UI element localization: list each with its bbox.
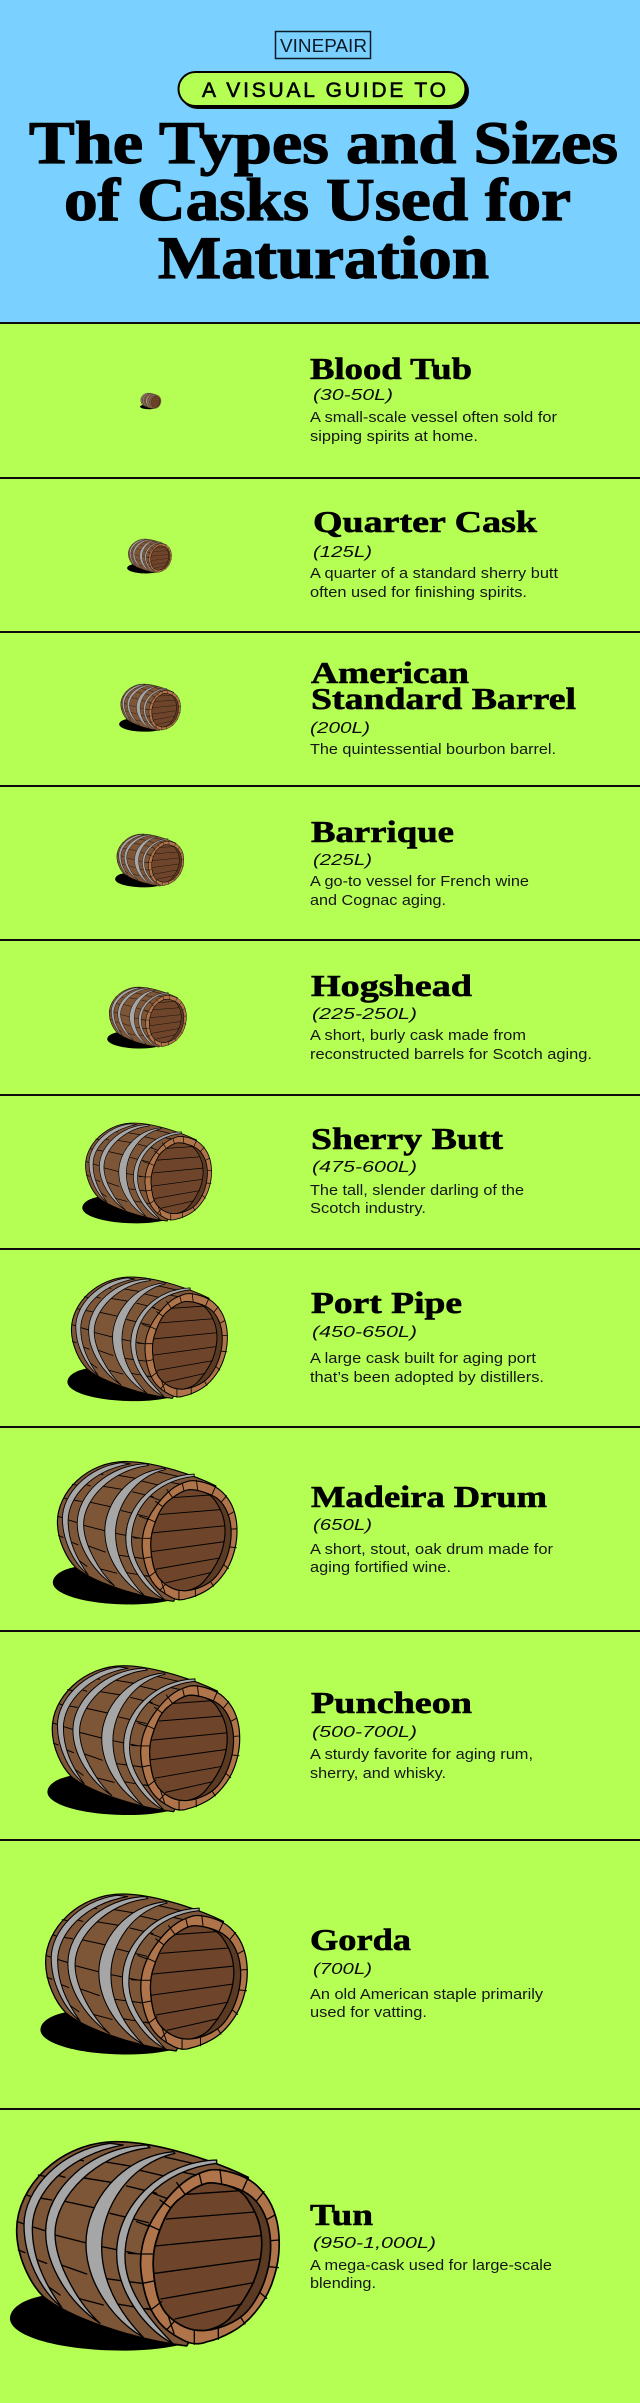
text: Barrique bbox=[310, 814, 529, 909]
text: Hogshead: A short, burly cask made from bbox=[310, 1028, 526, 1044]
text: Tun bbox=[310, 2197, 552, 2292]
panel: Puncheon bbox=[0, 1630, 640, 1840]
text: Barrique: (225L) bbox=[313, 852, 372, 869]
text: Puncheon bbox=[310, 1685, 533, 1782]
text: Blood Tub bbox=[310, 351, 557, 445]
text: Gorda: An old American staple primarily bbox=[310, 1987, 544, 2003]
text: Port Pipe: A large cask built for aging port bbox=[310, 1351, 536, 1367]
panel: Barrique bbox=[0, 785, 640, 940]
text: Puncheon: A sturdy favorite for aging rum, bbox=[310, 1747, 533, 1763]
panel: Hogshead bbox=[0, 939, 640, 1095]
text: Hogshead: reconstructed barrels for Scotch aging. bbox=[310, 1047, 592, 1063]
text: Gorda: (700L) bbox=[313, 1961, 372, 1978]
text: American Standard Barrel bbox=[310, 655, 576, 758]
badge: A Visual Guide To bbox=[178, 72, 469, 109]
text: Blood Tub: A small-scale vessel often sold for bbox=[310, 410, 557, 426]
text: Quarter Cask: Quarter Cask bbox=[313, 504, 538, 539]
text: Quarter Cask: often used for finishing spirits. bbox=[310, 585, 527, 601]
text: Barrique: and Cognac aging. bbox=[310, 893, 446, 909]
title: Maturation bbox=[158, 225, 489, 291]
text: American Standard Barrel: (200L) bbox=[310, 720, 370, 737]
text: Sherry Butt: Scotch industry. bbox=[310, 1201, 426, 1217]
text: Gorda: Gorda bbox=[310, 1922, 412, 1957]
text: Hogshead: (225-250L) bbox=[312, 1006, 417, 1023]
text: American Standard Barrel: Standard Barrel bbox=[311, 681, 576, 716]
icon: Barrique barrel bbox=[115, 834, 184, 887]
text: Puncheon: (500-700L) bbox=[312, 1724, 417, 1741]
text: Hogshead: Hogshead bbox=[311, 968, 472, 1003]
text: American Standard Barrel: The quintessential bourbon barrel. bbox=[310, 742, 556, 758]
text: Port Pipe: (450-650L) bbox=[312, 1324, 417, 1341]
text: Barrique: A go-to vessel for French wine bbox=[310, 874, 529, 890]
text: Port Pipe: Port Pipe bbox=[311, 1285, 462, 1320]
text: Hogshead bbox=[310, 968, 592, 1063]
text: Port Pipe bbox=[310, 1285, 544, 1386]
icon: Sherry Butt barrel bbox=[82, 1123, 212, 1223]
icon: Tun barrel bbox=[10, 2142, 279, 2351]
panel: Quarter Cask bbox=[0, 477, 640, 632]
panel: Gorda bbox=[0, 1839, 640, 2109]
text: Blood Tub: (30-50L) bbox=[313, 387, 393, 404]
text: Quarter Cask: A quarter of a standard sherry butt bbox=[310, 566, 558, 582]
text: Puncheon: sherry, and whisky. bbox=[310, 1766, 446, 1782]
text: Madeira Drum: (650L) bbox=[313, 1517, 372, 1534]
badge: A Visual Guide To: A VISUAL GUIDE TO bbox=[202, 79, 446, 102]
icon: American Standard Barrel barrel bbox=[119, 684, 181, 732]
panel: American Standard Barrel bbox=[0, 631, 640, 786]
text: Tun: blending. bbox=[310, 2276, 376, 2292]
icon: Puncheon barrel bbox=[47, 1666, 240, 1815]
panel: Blood Tub bbox=[0, 322, 640, 478]
panel: Tun bbox=[0, 2108, 640, 2403]
icon: Hogshead barrel bbox=[107, 987, 186, 1048]
text: Quarter Cask: (125L) bbox=[313, 544, 372, 561]
panel: Sherry Butt bbox=[0, 1094, 640, 1249]
icon: Quarter Cask barrel bbox=[127, 539, 172, 573]
title: The Types and Sizes bbox=[29, 110, 618, 176]
text: Barrique: Barrique bbox=[311, 814, 454, 849]
text: Sherry Butt: Sherry Butt bbox=[311, 1121, 504, 1156]
text: American Standard Barrel: American bbox=[311, 655, 469, 690]
text: Puncheon: Puncheon bbox=[311, 1685, 472, 1720]
text: Tun: Tun bbox=[310, 2197, 373, 2232]
title bbox=[29, 110, 618, 291]
icon: Port Pipe barrel bbox=[67, 1277, 227, 1401]
text: Sherry Butt bbox=[310, 1121, 524, 1217]
text: Gorda bbox=[310, 1922, 544, 2021]
text: Sherry Butt: The tall, slender darling of the bbox=[310, 1183, 524, 1199]
icon: Madeira Drum barrel bbox=[53, 1462, 237, 1604]
text: Quarter Cask bbox=[310, 504, 558, 601]
text: Port Pipe: that’s been adopted by distillers. bbox=[310, 1370, 544, 1386]
text: Sherry Butt: (475-600L) bbox=[312, 1159, 417, 1176]
panel: header bbox=[0, 0, 640, 323]
text: Madeira Drum bbox=[310, 1479, 553, 1576]
panel: Port Pipe bbox=[0, 1248, 640, 1427]
icon: Blood Tub barrel bbox=[140, 393, 161, 409]
text: Gorda: used for vatting. bbox=[310, 2005, 427, 2021]
logo: VinePair: VINEPAIR bbox=[280, 36, 367, 56]
panel: Madeira Drum bbox=[0, 1426, 640, 1631]
text: Blood Tub: sipping spirits at home. bbox=[310, 429, 478, 445]
logo: VinePair bbox=[276, 32, 370, 58]
title: of Casks Used for bbox=[64, 167, 571, 233]
text: Madeira Drum: A short, stout, oak drum made for bbox=[310, 1542, 553, 1558]
text: Blood Tub: Blood Tub bbox=[310, 351, 472, 386]
text: Madeira Drum: aging fortified wine. bbox=[310, 1560, 451, 1576]
text: Tun: (950-1,000L) bbox=[313, 2235, 436, 2252]
text: Tun: A mega-cask used for large-scale bbox=[310, 2258, 552, 2274]
icon: Gorda barrel bbox=[40, 1894, 247, 2055]
text: Madeira Drum: Madeira Drum bbox=[311, 1479, 547, 1514]
